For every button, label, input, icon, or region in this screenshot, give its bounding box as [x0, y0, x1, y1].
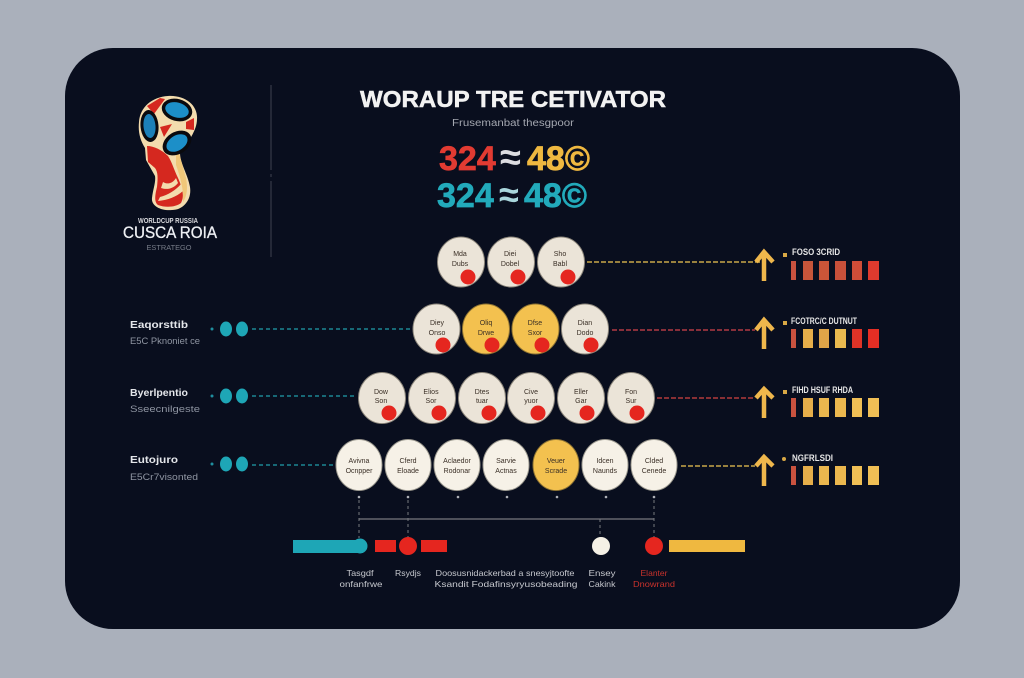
- logo wordmark: CUSCA ROIA: [123, 224, 217, 242]
- row 4 bubbles: Clded: [645, 458, 663, 465]
- left row labels: Eutojuro: [130, 455, 178, 466]
- bottom connector bracket: [358, 496, 655, 538]
- row 3 bubbles: Son: [375, 398, 387, 405]
- right label row 2 with bars: FCOTRC/C DUTNUT: [791, 316, 857, 326]
- right dashed connectors: [587, 262, 760, 466]
- row 1 bubbles: Dobel: [501, 261, 520, 268]
- row 3 bubbles: Dow: [374, 389, 389, 396]
- row 3 bubbles: tuar: [476, 398, 489, 405]
- timeline legend labels: Cakink: [588, 579, 616, 589]
- row 4 bubbles: Cenede: [642, 468, 666, 475]
- row 3 bubbles: [358, 372, 654, 424]
- row 2 bubbles: Drwe: [478, 330, 494, 337]
- row 3 bubbles: Elios: [423, 389, 439, 396]
- stat line: red and gold: 324: [439, 140, 496, 178]
- logo wordmark: [123, 218, 217, 252]
- row 3 bubbles: yuor: [524, 398, 538, 405]
- timeline legend labels: [340, 568, 675, 589]
- row 4 bubbles: Naunds: [593, 468, 618, 475]
- right label row 1 with bars: [783, 247, 879, 280]
- row 1 bubbles: [438, 237, 584, 287]
- panel: dark card: [65, 48, 960, 629]
- row 4 bubbles: [336, 440, 677, 490]
- right label row 4 with bars: [782, 453, 879, 485]
- title: WORAUP TRE CETIVATOR: [360, 86, 666, 112]
- left row labels: [130, 320, 200, 483]
- row 3 bubbles: Eller: [574, 389, 589, 396]
- row 2 bubbles: Sxor: [528, 330, 543, 337]
- row 1 bubbles: Dubs: [452, 261, 469, 268]
- arrows: [756, 252, 773, 486]
- row 4 bubbles: Eloade: [397, 468, 419, 475]
- row 4 bubbles: Scrade: [545, 468, 567, 475]
- teal connector dots and dashes: [210, 322, 411, 472]
- right label row 4 with bars: NGFRLSDI: [792, 453, 833, 463]
- stat line: teal: 324: [437, 177, 494, 215]
- stat line: teal: [437, 174, 587, 215]
- row 2 bubbles: Oliq: [480, 320, 492, 327]
- row 1 bubbles: Sho: [554, 251, 566, 258]
- row 2 bubbles: Dfse: [528, 320, 542, 327]
- row 2 bubbles: Dian: [578, 320, 592, 327]
- timeline legend labels: Ksandit Fodafinsyryusobeading: [434, 579, 578, 589]
- timeline legend labels: Doosusnidackerbad a snesyjtoofte: [436, 568, 575, 578]
- timeline legend labels: Dnowrand: [633, 579, 675, 589]
- row 1 bubbles: Babl: [553, 261, 567, 268]
- row 3 bubbles: Dtes: [475, 389, 490, 396]
- row 3 bubbles: Sor: [426, 398, 437, 405]
- right label row 1 with bars: FOSO 3CRID: [792, 247, 840, 257]
- row 3 bubbles: Sur: [626, 398, 637, 405]
- left row labels: E5Cr7visonted: [130, 472, 198, 483]
- icon: trophy logo: [123, 95, 217, 252]
- stat line: teal: 48©: [524, 177, 587, 215]
- stat line: red and gold: 48©: [527, 140, 590, 178]
- row 1 bubbles: Diei: [504, 251, 516, 258]
- row 2 bubbles: Onso: [429, 330, 445, 337]
- subtitle: Frusemanbat thesgpoor: [452, 118, 575, 129]
- row 4 bubbles: Actnas: [495, 468, 517, 475]
- row 4 bubbles: Sarvie: [496, 458, 516, 465]
- stat line: red and gold: [439, 137, 590, 179]
- left row labels: Eaqorsttib: [130, 320, 188, 331]
- row 4 bubbles: Avivna: [349, 458, 370, 465]
- row 3 bubbles: Cive: [524, 389, 538, 396]
- timeline legend labels: Ensey: [588, 568, 616, 578]
- logo wordmark: WORLDCUP RUSSIA: [138, 218, 198, 225]
- stat line: red and gold: ≈: [500, 137, 521, 179]
- left row labels: E5C Pknoniet ce: [130, 336, 200, 347]
- row 2 bubbles: Dodo: [577, 330, 593, 337]
- stat line: teal: ≈: [499, 174, 519, 215]
- logo wordmark: ESTRATEGO: [146, 243, 192, 252]
- timeline legend markers: [293, 537, 745, 555]
- row 1 bubbles: Mda: [453, 251, 467, 258]
- right label row 2 with bars: [783, 316, 879, 348]
- row 3 bubbles: Fon: [625, 389, 637, 396]
- row 3 bubbles: Gar: [575, 398, 588, 405]
- divider line: [270, 85, 272, 257]
- timeline legend labels: Tasgdf: [346, 568, 374, 578]
- right label row 3 with bars: [783, 385, 879, 417]
- row 4 bubbles: Aclaedor: [443, 458, 471, 465]
- row 4 bubbles: Idcen: [596, 458, 614, 465]
- row 2 bubbles: Diey: [430, 320, 444, 327]
- timeline legend labels: onfanfrwe: [340, 579, 383, 589]
- row 4 bubbles: Rodonar: [444, 468, 471, 475]
- timeline legend labels: Rsydjs: [395, 568, 421, 578]
- row 4 bubbles: Ocnpper: [346, 468, 373, 475]
- left row labels: Byerlpentio: [130, 388, 188, 399]
- row 2 bubbles: [413, 304, 608, 354]
- row 4 bubbles: Veuer: [547, 458, 566, 465]
- right label row 3 with bars: FIHD HSUF RHDA: [792, 385, 853, 395]
- row 4 bubbles: Cferd: [399, 458, 417, 465]
- left row labels: Sseecnilgeste: [130, 404, 200, 415]
- timeline legend labels: Elanter: [640, 568, 668, 578]
